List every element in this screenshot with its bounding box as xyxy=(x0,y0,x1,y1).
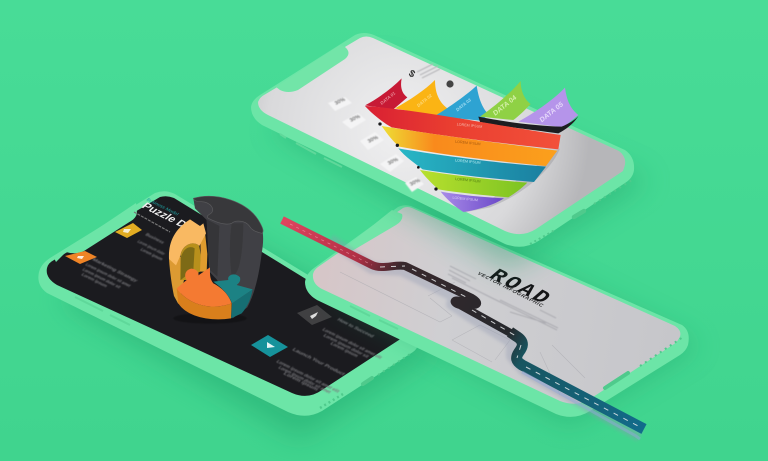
heading: ROAD: ROAD xyxy=(483,266,557,309)
text block: right item: How to Succeed xyxy=(336,317,375,339)
teal piece xyxy=(231,289,253,318)
text block: left item: Lorem ipsum xyxy=(80,272,109,289)
back tab: orange: DATA 02 xyxy=(416,92,433,108)
back tab: orange xyxy=(395,80,447,116)
percentage tags: 30% xyxy=(367,135,380,145)
black shelf xyxy=(478,116,578,133)
band: cyan xyxy=(398,148,546,182)
back tab: red: DATA 01 xyxy=(380,90,397,106)
text block: right item: Lorem ipsum dolor sit amet elit xyxy=(321,327,383,360)
back tab: purple: DATA 05 xyxy=(539,101,565,124)
speaker holes xyxy=(605,373,628,388)
center dashes xyxy=(380,266,640,427)
text block: right item xyxy=(321,317,383,360)
icon: grey tile xyxy=(297,305,332,325)
screen xyxy=(47,196,402,396)
back tab: blue: DATA 03 xyxy=(455,97,472,113)
road xyxy=(282,220,644,439)
text block: launch item: Launch Your Product xyxy=(291,347,346,377)
notch xyxy=(54,203,137,262)
percentage tags xyxy=(328,97,424,192)
band: purple: LOREM IPSUM xyxy=(452,196,478,202)
dark piece xyxy=(193,196,263,318)
faint map lines xyxy=(340,272,585,395)
orange piece xyxy=(177,288,232,319)
icon: dollar: $ xyxy=(406,68,417,81)
band: green: LOREM IPSUM xyxy=(455,177,481,184)
road surface xyxy=(282,220,516,336)
percentage tags: 30% xyxy=(409,178,422,188)
side buttons xyxy=(350,306,398,329)
text block: right item: Lorem ipsum xyxy=(329,341,360,359)
heading: Puzzle Data: Puzzle Data xyxy=(139,201,204,237)
band: cyan: LOREM IPSUM xyxy=(455,158,481,165)
text block: launch item xyxy=(275,347,346,395)
back tab: red xyxy=(365,78,407,109)
text block: second item: Lorem ipsum xyxy=(139,247,164,262)
phone: puzzle diagram (left) xyxy=(38,191,440,440)
chart: ribbon funnel xyxy=(365,78,578,213)
percentage tags: 30% xyxy=(334,97,347,107)
screen xyxy=(313,207,680,404)
road shadow xyxy=(330,240,640,436)
phone body xyxy=(38,191,418,416)
side buttons xyxy=(75,297,130,325)
grey shadow under funnel xyxy=(463,148,560,213)
icon: orange tile xyxy=(65,251,97,264)
text block: second item: Business xyxy=(144,232,166,245)
text block: right item: Lorem ipsum dolor sit xyxy=(322,333,370,359)
band: orange xyxy=(382,126,557,166)
text block: left item: Marketing Strategy xyxy=(91,257,139,283)
band: purple xyxy=(441,192,504,212)
text block: launch item: Lorem ipsum dolor sit amet elit xyxy=(275,359,341,394)
heading: Puzzle Data: Business Model xyxy=(145,197,180,217)
speaker holes xyxy=(320,394,343,408)
text block: launch item: Lorem ipsum xyxy=(282,371,320,392)
road edge highlight xyxy=(522,372,640,439)
phone body xyxy=(305,205,689,417)
screen xyxy=(258,36,625,234)
text block: left item xyxy=(80,257,139,290)
side buttons xyxy=(280,134,342,167)
top label xyxy=(417,64,440,78)
speaker holes xyxy=(530,230,555,244)
icon: globe xyxy=(446,80,454,88)
band: green xyxy=(420,170,527,197)
text block: second item: Lorem ipsum dolor xyxy=(136,239,166,257)
phone body xyxy=(251,33,634,247)
text block: left item: Lorem ipsum dolor sit amet xyxy=(84,262,132,288)
chart: 3D puzzle cylinder xyxy=(169,196,263,324)
percentage tags: 30% xyxy=(349,114,362,124)
percentage tags: 30% xyxy=(387,157,400,167)
back tab: green xyxy=(480,81,531,120)
band fold dots xyxy=(378,122,438,191)
back tab: purple xyxy=(518,88,578,127)
phone: road diagram (right) xyxy=(282,205,700,439)
subtitle: VECTOR INFOGRAPHIC xyxy=(476,271,545,309)
icon: yellow tile xyxy=(115,223,142,238)
description lines xyxy=(448,266,558,330)
text block: second item xyxy=(136,232,166,262)
back tab: green: DATA 04 xyxy=(492,94,518,118)
phone: ribbon funnel (top) xyxy=(251,33,650,270)
notch xyxy=(276,45,348,92)
back tab: blue xyxy=(435,86,489,121)
band: orange: LOREM IPSUM xyxy=(455,140,481,146)
yellow piece xyxy=(169,257,184,304)
text block: launch item: Lorem ipsum dolor sit amet xyxy=(277,365,332,395)
icon: teal tile xyxy=(251,335,288,357)
text block: left item: Lorem ipsum dolor sit xyxy=(81,267,122,290)
notch xyxy=(342,210,402,251)
band: red xyxy=(365,106,561,149)
band: red: LOREM IPSUM xyxy=(457,122,482,129)
